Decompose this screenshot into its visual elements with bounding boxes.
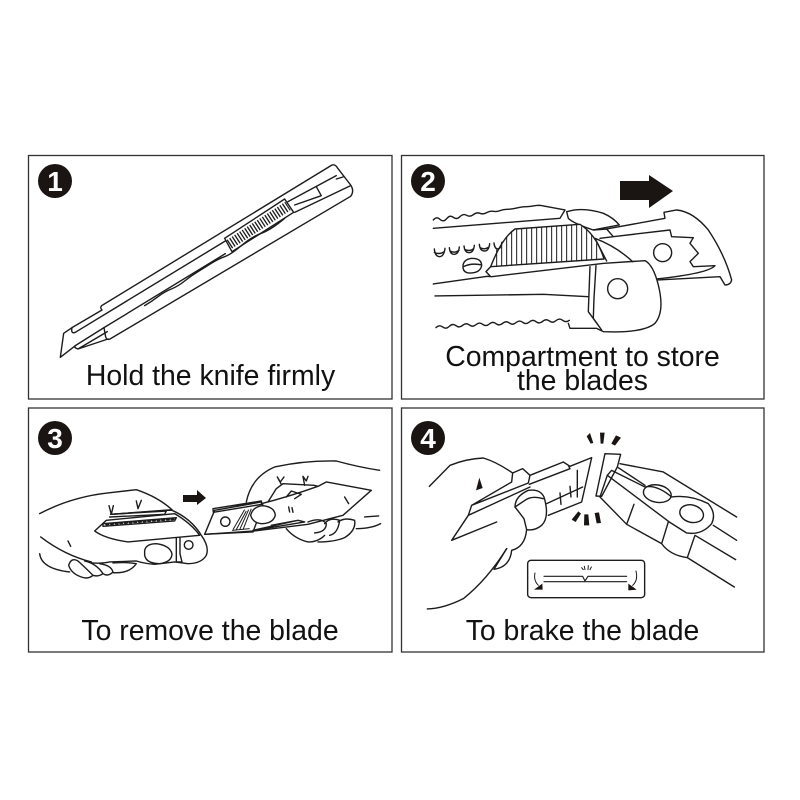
illustration: closed utility knife: [60, 165, 353, 357]
step badge 3: [38, 421, 72, 455]
panel 2: blade compartment: [402, 156, 764, 399]
illustration: hands pulling the blade out: [40, 461, 381, 578]
panel 2: blade compartment: the blades: [517, 365, 648, 397]
step badge 2: [411, 164, 445, 198]
step badge 4: 4: [420, 423, 436, 454]
panel 4: break the blade: [402, 408, 764, 652]
mini diagram: [528, 560, 645, 598]
step badge 2: 2: [420, 166, 436, 197]
caption 3: To remove the blade: [81, 615, 339, 647]
caption 1: Hold the knife firmly: [86, 360, 336, 392]
caption 2: Compartment to store: [445, 341, 720, 373]
illustration: open knife with compartment: [433, 205, 732, 332]
panel 3: remove the blade: [28, 408, 392, 652]
step badge 1: 1: [47, 166, 63, 197]
arrow right: [620, 175, 673, 208]
illustration: hand and pliers snapping the blade: [427, 433, 737, 609]
step badge 4: [411, 421, 445, 455]
arrow right small: [183, 490, 206, 505]
panel 1: hold the knife: [28, 156, 392, 399]
caption 4: To brake the blade: [466, 615, 699, 647]
step badge 1: [38, 164, 72, 198]
step badge 3: 3: [47, 423, 63, 454]
